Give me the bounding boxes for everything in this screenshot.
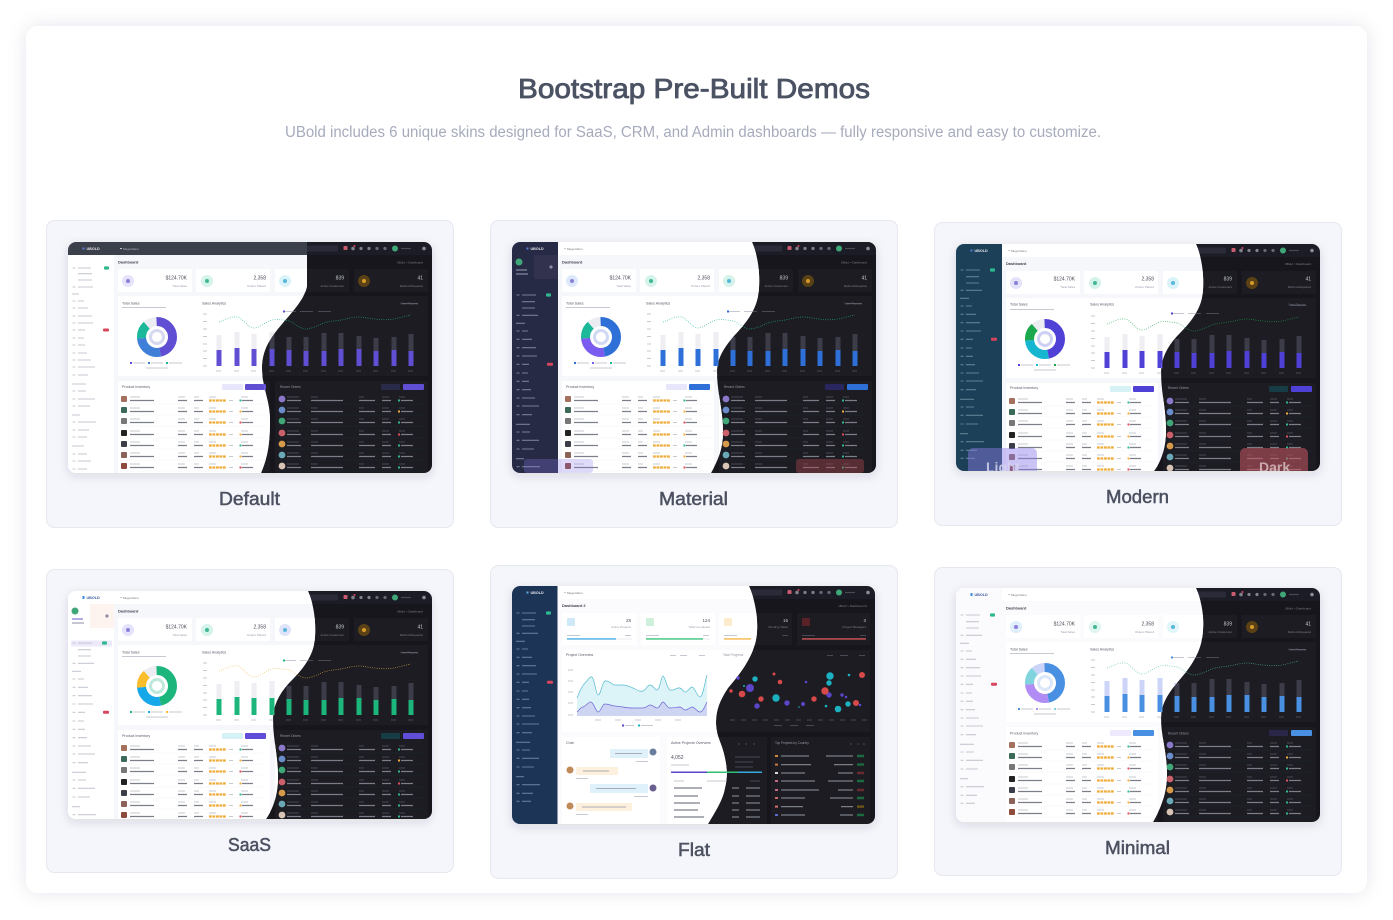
screenshot: Flat dashboard light and dark split: 28 [626, 618, 631, 623]
screenshot: Flat dashboard light and dark split: 16 [783, 618, 788, 623]
label: Minimal: Minimal [1105, 838, 1170, 858]
screenshot: Modern dashboard light and dark split: Total Sales [1060, 285, 1075, 289]
screenshot: Modern dashboard light and dark split: View Reports [1288, 302, 1306, 306]
screenshot: SaaS dashboard light and dark split: Sales Analytics [202, 650, 226, 654]
screenshot: Material dashboard light and dark split: Total Sales [616, 284, 631, 288]
panel: Modern demo [934, 222, 1342, 526]
screenshot: Modern dashboard light and dark split: Product Inventory [1010, 386, 1038, 390]
screenshot: Minimal dashboard light and dark split: Recent Orders [1168, 732, 1189, 736]
screenshot: Minimal dashboard light and dark split [956, 588, 1320, 828]
screenshot: Flat dashboard light and dark split: 3 [863, 618, 866, 623]
screenshot: Modern dashboard light and dark split: Recent Orders [1168, 386, 1189, 390]
screenshot: SaaS dashboard light and dark split: Orders Placed [247, 633, 266, 637]
screenshot: Minimal dashboard light and dark split: Product Inventory [1010, 732, 1038, 736]
screenshot: Default dashboard light and dark split: 839 [336, 276, 344, 282]
panel: SaaS demo [46, 570, 454, 872]
screenshot: Flat dashboard light and dark split: Project Managers [842, 625, 866, 629]
screenshot: SaaS dashboard light and dark split: UBOLD [86, 596, 100, 600]
screenshot: Modern dashboard light and dark split: Total Sales [1010, 302, 1028, 306]
screenshot: Default dashboard light and dark split: Recent Orders [280, 385, 301, 389]
screenshot: Material dashboard light and dark split: View Reports [844, 302, 862, 306]
label: Flat: Flat [678, 840, 710, 860]
screenshot: Material dashboard light and dark split: Orders Placed [691, 284, 710, 288]
screenshot: Minimal dashboard light and dark split: Total Sales [1010, 648, 1028, 652]
screenshot: Material dashboard light and dark split: 2,358 [697, 276, 710, 282]
screenshot: Default dashboard light and dark split: Total Sales [122, 302, 140, 306]
screenshot: Minimal dashboard light and dark split: Dashboard [1006, 606, 1027, 610]
screenshot: Default dashboard light and dark split: $124.70K [166, 276, 188, 282]
screenshot: SaaS dashboard light and dark split: View Reports [400, 650, 418, 654]
screenshot: Modern dashboard light and dark split: Mega Menu [1011, 249, 1027, 253]
title: Bootstrap Pre-Built Demos [518, 73, 870, 104]
screenshot: Minimal dashboard light and dark split: UBold > Dashboard [1285, 606, 1311, 610]
screenshot: Material dashboard light and dark split: UBOLD [530, 247, 544, 251]
screenshot: Flat dashboard light and dark split: Top Projects by Country [775, 741, 809, 745]
screenshot: Modern dashboard light and dark split: Orders Placed [1135, 285, 1154, 289]
screenshot: Modern dashboard light and dark split: 839 [1224, 276, 1232, 282]
screenshot: Default dashboard light and dark split: Orders Placed [247, 284, 266, 288]
screenshot: Material dashboard light and dark split: Refund Requests [844, 284, 867, 288]
screenshot: Default dashboard light and dark split: 41 [417, 276, 423, 282]
screenshot: Minimal dashboard light and dark split: View Reports [1288, 648, 1306, 652]
screenshot: Material dashboard light and dark split: $124.70K [610, 276, 632, 282]
screenshot: Default dashboard light and dark split: UBold > Dashboard [397, 260, 423, 264]
screenshot: Flat dashboard light and dark split: Dashboard 2 [562, 603, 586, 608]
screenshot: Modern dashboard light and dark split: UBOLD [974, 249, 988, 253]
screenshot: Flat dashboard light and dark split: Project Overview [566, 653, 594, 657]
screenshot: Minimal dashboard light and dark split: Orders Placed [1135, 630, 1154, 634]
screenshot: Flat dashboard light and dark split: 124 [702, 618, 710, 623]
label: Default: Default [219, 489, 280, 509]
screenshot: Material dashboard light and dark split: 41 [861, 276, 867, 282]
screenshot: Material dashboard light and dark split: Product Inventory [566, 385, 594, 389]
screenshot: Modern dashboard light and dark split: Dashboard [1006, 261, 1027, 266]
screenshot: Modern dashboard light and dark split: 41 [1305, 276, 1311, 282]
screenshot: SaaS dashboard light and dark split: Refund Requests [400, 633, 423, 637]
screenshot: SaaS dashboard light and dark split [68, 591, 432, 831]
screenshot: Material dashboard light and dark split: Active Customers [764, 284, 788, 288]
label: Material: Material [659, 489, 728, 509]
screenshot: Default dashboard light and dark split: Dashboard [118, 260, 139, 264]
screenshot: SaaS dashboard light and dark split: Total Sales [172, 633, 187, 637]
panel: Minimal demo [934, 568, 1342, 876]
screenshot: Minimal dashboard light and dark split: Active Customers [1208, 630, 1232, 634]
panel: Material demo [490, 220, 898, 528]
screenshot: SaaS dashboard light and dark split: 2,358 [253, 624, 266, 630]
screenshot: Flat dashboard light and dark split: Mega Menu [567, 591, 583, 595]
screenshot: SaaS dashboard light and dark split: Dashboard [118, 608, 139, 614]
screenshot: SaaS dashboard light and dark split: Product Inventory [122, 734, 150, 738]
screenshot: Default dashboard light and dark split: View Reports [400, 302, 418, 306]
badge: Dark [1240, 448, 1308, 471]
screenshot: SaaS dashboard light and dark split: $124.70K [166, 624, 188, 630]
screenshot: SaaS dashboard light and dark split: 839 [336, 624, 344, 630]
screenshot: Flat dashboard light and dark split: 4,052 [671, 755, 684, 761]
screenshot: SaaS dashboard light and dark split: Total Sales [122, 650, 140, 654]
screenshot: Material dashboard light and dark split [512, 242, 876, 483]
screenshot: Default dashboard light and dark split: Sales Analytics [202, 302, 226, 306]
screenshot: Minimal dashboard light and dark split: 2,358 [1141, 622, 1154, 628]
screenshot: Modern dashboard light and dark split: Active Customers [1208, 285, 1232, 289]
screenshot: Flat dashboard light and dark split: Active Projects [611, 625, 631, 629]
screenshot: Default dashboard light and dark split: UBOLD [86, 247, 100, 251]
screenshot: Flat dashboard light and dark split: Pending Tasks [769, 625, 788, 629]
subtitle: UBold includes 6 unique skins designed for SaaS, CRM, and Admin dashboards — fully responsive and easy to customize. [285, 124, 1101, 141]
badge: Light: Light [986, 459, 1021, 475]
screenshot: Flat dashboard light and dark split: Chat [566, 741, 574, 745]
screenshot: Minimal dashboard light and dark split: UBOLD [974, 593, 988, 597]
screenshot: Flat dashboard light and dark split: Total Completed [688, 625, 710, 629]
panel: Default demo [46, 220, 454, 528]
screenshot: Default dashboard light and dark split: 2,358 [253, 276, 266, 282]
screenshot: Default dashboard light and dark split: Product Inventory [122, 385, 150, 389]
screenshot: Minimal dashboard light and dark split: Total Sales [1060, 630, 1075, 634]
screenshot: Minimal dashboard light and dark split: Sales Analytics [1090, 648, 1114, 652]
label: SaaS: SaaS [228, 835, 271, 855]
screenshot: Minimal dashboard light and dark split: Refund Requests [1288, 630, 1311, 634]
screenshot: Flat dashboard light and dark split: Active Projects Overview [671, 741, 711, 745]
screenshot: Material dashboard light and dark split: Dashboard [562, 260, 583, 264]
panel: Flat demo [490, 566, 898, 878]
screenshot: Default dashboard light and dark split: Mega Menu [123, 247, 139, 251]
badge: Dark: Dark [1259, 459, 1290, 475]
screenshot: SaaS dashboard light and dark split: Active Customers [320, 633, 344, 637]
screenshot: Material dashboard light and dark split: UBold > Dashboard [841, 260, 867, 264]
screenshot: Material dashboard light and dark split: 839 [780, 276, 788, 282]
screenshot: Default dashboard light and dark split: Total Sales [172, 284, 187, 288]
screenshot: Default dashboard light and dark split: Refund Requests [400, 284, 423, 288]
screenshot: SaaS dashboard light and dark split: 41 [417, 624, 423, 630]
screenshot: Material dashboard light and dark split: Total Sales [566, 302, 584, 306]
screenshot: Minimal dashboard light and dark split: Mega Menu [1011, 593, 1027, 597]
screenshot: Minimal dashboard light and dark split: 41 [1305, 622, 1311, 628]
screenshot: Material dashboard light and dark split: Sales Analytics [646, 302, 670, 306]
screenshot: Minimal dashboard light and dark split: 839 [1224, 622, 1232, 628]
screenshot: Modern dashboard light and dark split: 2,358 [1141, 276, 1154, 282]
label: Modern: Modern [1106, 487, 1169, 507]
screenshot: SaaS dashboard light and dark split: Recent Orders [280, 734, 301, 738]
screenshot: Modern dashboard light and dark split: UBold > Dashboard [1285, 262, 1311, 266]
screenshot: Modern dashboard light and dark split: Sales Analytics [1090, 302, 1114, 306]
screenshot: Flat dashboard light and dark split [512, 586, 876, 826]
screenshot: Flat dashboard light and dark split: UBOLD [530, 591, 544, 595]
screenshot: Material dashboard light and dark split: Mega Menu [567, 247, 583, 251]
screenshot: Default dashboard light and dark split [68, 242, 432, 482]
badge: Light [968, 448, 1037, 471]
screenshot: Minimal dashboard light and dark split: $124.70K [1054, 622, 1076, 628]
screenshot: Modern dashboard light and dark split [956, 244, 1320, 484]
screenshot: Modern dashboard light and dark split: $124.70K [1054, 276, 1076, 282]
screenshot: SaaS dashboard light and dark split: UBold > Dashboard [397, 610, 423, 614]
screenshot: Modern dashboard light and dark split: Refund Requests [1288, 285, 1311, 289]
screenshot: SaaS dashboard light and dark split: Mega Menu [123, 596, 139, 600]
screenshot: Flat dashboard light and dark split: UBold > Dashboard 2 [838, 604, 867, 608]
screenshot: Default dashboard light and dark split: Active Customers [320, 284, 344, 288]
screenshot: Flat dashboard light and dark split: Task Progress [723, 653, 744, 657]
screenshot: Material dashboard light and dark split: Recent Orders [724, 385, 745, 389]
